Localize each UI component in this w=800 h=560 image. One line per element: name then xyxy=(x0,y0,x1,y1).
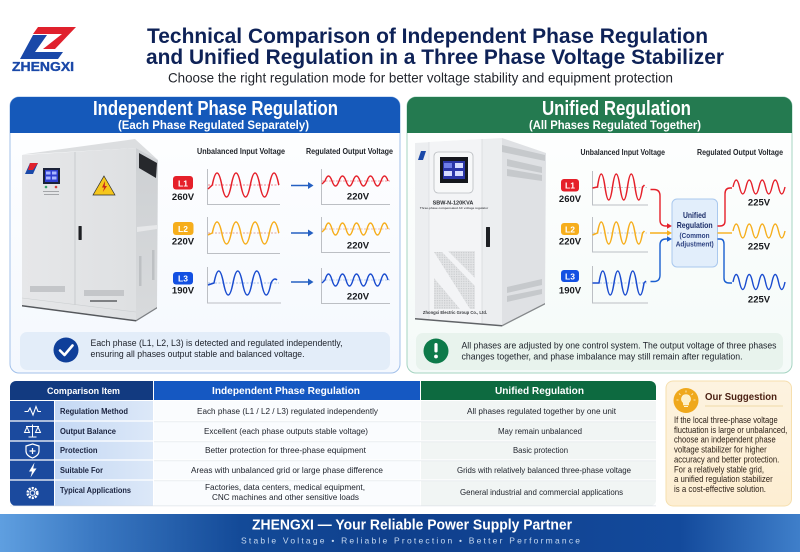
box: unified regulation: (Common xyxy=(680,231,710,240)
phase row: L2 independent: L2 xyxy=(178,224,188,234)
machine: white cabinet stabilizer: SBW-N-120KVA xyxy=(433,200,473,206)
table header row: Independent Phase Regulation xyxy=(212,386,360,397)
icon: shield xyxy=(26,444,39,458)
suggestion text: a unified regulation stabilizer xyxy=(674,474,773,484)
box: unified regulation: Adjustment) xyxy=(676,240,714,248)
suggestion text: For a relatively stable grid, xyxy=(674,464,764,474)
callout: independent regulation: Each phase (L1, L2, L3) is detected and regulated independently, xyxy=(90,338,342,349)
machine: white cabinet stabilizer: Zhongxi Electric Group Co., Ltd. xyxy=(423,310,487,315)
row: protection: Basic protection xyxy=(513,445,568,455)
phase output: L1 xyxy=(733,180,785,208)
table header row: Unified Regulation xyxy=(495,386,584,397)
panel header: unified: Unified Regulation xyxy=(542,98,691,120)
phase row: L2 independent: 220V xyxy=(347,240,370,252)
footer banner: ZHENGXI — Your Reliable Power Supply Partner xyxy=(252,518,572,534)
suggestion text: voltage stabilizer for higher xyxy=(674,445,767,455)
phase output: L1: 225V xyxy=(748,198,771,208)
callout: independent regulation xyxy=(20,332,390,370)
panel: our suggestion: Our Suggestion xyxy=(705,391,777,403)
phase input: L3 unified xyxy=(559,266,648,303)
phase input: L2 unified: L2 xyxy=(565,224,575,234)
row: typical applications: Typical Applications xyxy=(60,485,131,495)
panel header: unified xyxy=(407,97,792,133)
panel header: unified: (All Phases Regulated Together) xyxy=(529,118,701,132)
row: regulation method: All phases regulated together by one unit xyxy=(467,406,617,416)
column heading: input: Unbalanced Input Voltage xyxy=(580,147,665,157)
title xyxy=(146,24,725,69)
box: unified regulation: Unified xyxy=(683,211,706,220)
row: protection: Better protection for three-phase equipment xyxy=(205,445,367,455)
row: protection: Protection xyxy=(60,445,98,455)
panel: our suggestion xyxy=(666,381,792,506)
row: suitable for xyxy=(29,462,631,478)
callout: independent regulation: ensuring all phases output stable and balanced voltage. xyxy=(90,349,304,360)
phase input: L1 unified: 260V xyxy=(559,194,582,205)
column heading: output: Regulated Output Voltage xyxy=(306,146,393,156)
panel header: independent xyxy=(10,97,400,133)
callout: unified regulation: All phases are adjusted by one control system. The output voltage of three phases xyxy=(462,340,777,352)
column heading: input: Unbalanced Input Voltage xyxy=(197,146,285,156)
box: unified regulation: Regulation xyxy=(677,221,713,230)
suggestion text: is a cost-effective solution. xyxy=(674,484,766,494)
phase input: L2 unified xyxy=(559,217,648,252)
row: regulation method: Regulation Method xyxy=(60,406,128,416)
phase input: L3 unified: 190V xyxy=(559,286,582,296)
column heading: output: Regulated Output Voltage xyxy=(697,147,783,157)
table header row: Comparison Item xyxy=(47,386,120,397)
phase input: L1 unified: L1 xyxy=(565,180,575,190)
row: typical applications: Factories, data centers, medical equipment, xyxy=(205,482,365,492)
callout: unified regulation: changes together, and phase imbalance may still remain after regulation. xyxy=(462,352,742,362)
comparison table xyxy=(10,381,656,506)
footer banner: Stable Voltage • Reliable Protection • Better Performance xyxy=(241,536,580,546)
suggestion text: accuracy and better protection. xyxy=(674,454,779,464)
table header row xyxy=(10,381,656,400)
panel: unified regulation xyxy=(407,97,792,373)
phase output: L3: 225V xyxy=(748,294,771,306)
arrows: inputs to unified regulation xyxy=(650,190,672,282)
machine: floor cabinet stabilizer xyxy=(22,139,158,322)
subtitle: Choose the right regulation mode for better voltage stability and equipment protection xyxy=(168,70,673,86)
phase input: L2 unified: 220V xyxy=(559,236,582,248)
phase input: L1 unified xyxy=(559,171,648,205)
row: output balance xyxy=(24,424,582,437)
row: protection xyxy=(26,444,568,458)
suggestion text xyxy=(674,415,787,494)
icon: check mark xyxy=(54,338,78,362)
row: suitable for: Grids with relatively balanced three-phase voltage xyxy=(457,465,631,475)
phase output: L2 xyxy=(733,224,785,252)
phase row: L1 independent: 220V xyxy=(347,192,370,202)
phase row: L2 independent: 220V xyxy=(172,236,195,248)
icon: pulse wave xyxy=(24,406,41,415)
row: regulation method xyxy=(24,406,617,416)
panel header: independent: (Each Phase Regulated Separately) xyxy=(118,118,309,132)
phase row: L3 independent: 220V xyxy=(347,292,370,302)
phase row: L3 independent: L3 xyxy=(178,274,188,284)
icon: exclamation xyxy=(424,338,448,364)
phase row: L2 independent xyxy=(172,217,390,254)
panel: independent phase regulation xyxy=(10,97,400,373)
phase row: L1 independent: 260V xyxy=(172,192,195,203)
row: output balance: Output Balance xyxy=(60,426,116,436)
row: typical applications xyxy=(28,482,623,502)
footer banner xyxy=(0,514,800,552)
phase input: L3 unified: L3 xyxy=(565,272,575,282)
table column backgrounds xyxy=(10,401,656,506)
phase row: L1 independent: L1 xyxy=(178,178,188,188)
phase row: L3 independent: 190V xyxy=(172,286,195,296)
title: Technical Comparison of Independent Phase Regulation xyxy=(147,24,708,48)
callout: unified regulation xyxy=(416,333,783,370)
phase output: L3 xyxy=(733,274,785,306)
title: and Unified Regulation in a Three Phase Voltage Stabilizer xyxy=(146,45,725,69)
suggestion text: If the local three-phase voltage xyxy=(674,415,778,425)
icon: scales xyxy=(24,424,40,437)
phase output: L2: 225V xyxy=(748,242,771,252)
icon: gear xyxy=(28,488,37,498)
row: output balance: Excellent (each phase outputs stable voltage) xyxy=(204,426,368,436)
box: unified regulation xyxy=(672,199,718,267)
row: suitable for: Areas with unbalanced grid or large phase difference xyxy=(191,465,383,475)
icon: lightning bolt xyxy=(29,462,36,478)
arrows: unified regulation to outputs xyxy=(718,188,732,283)
row: typical applications: General industrial and commercial applications xyxy=(460,487,623,497)
machine: white cabinet stabilizer xyxy=(415,138,546,326)
logo: ZHENGXI: ZHENGXI xyxy=(12,60,74,74)
logo: ZHENGXI xyxy=(12,27,76,74)
row: output balance: May remain unbalanced xyxy=(498,426,582,436)
row: regulation method: Each phase (L1 / L2 / L3) regulated independently xyxy=(197,406,379,416)
row: suitable for: Suitable For xyxy=(60,465,104,475)
icon: light bulb xyxy=(674,388,698,413)
panel header: independent: Independent Phase Regulation xyxy=(93,98,338,120)
phase row: L3 independent xyxy=(172,267,390,304)
phase row: L1 independent xyxy=(172,169,390,204)
suggestion text: choose an independent phase xyxy=(674,435,776,445)
machine: white cabinet stabilizer: Three-phase compensated AC voltage regulator xyxy=(420,206,489,210)
row: typical applications: CNC machines and other sensitive loads xyxy=(212,492,359,502)
